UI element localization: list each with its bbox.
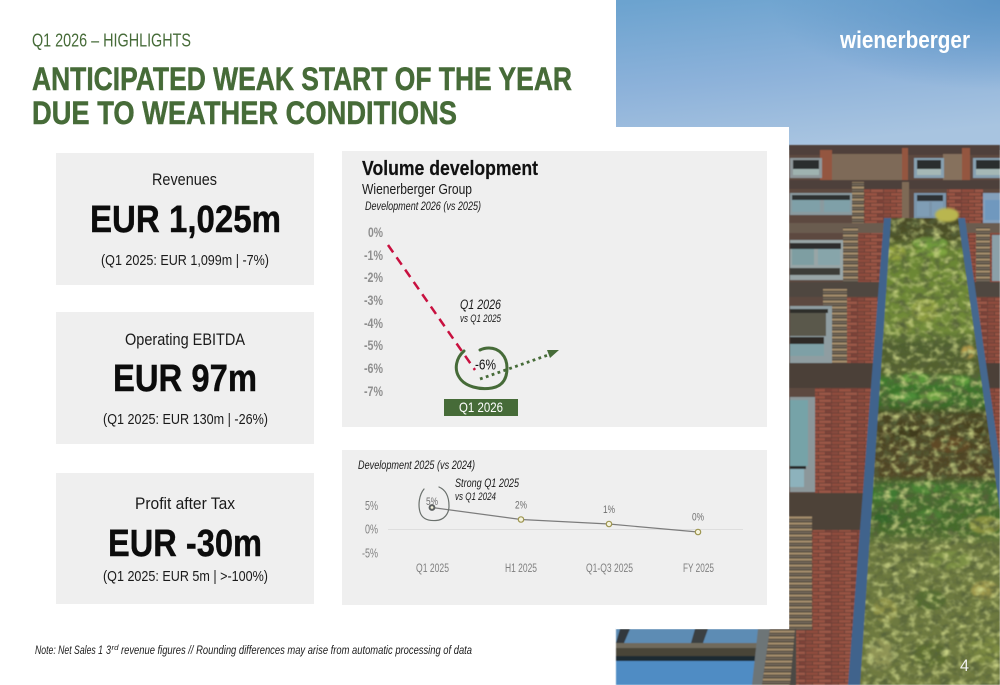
panel: operating EBITDA: EUR 97m [113,358,257,400]
title: DUE TO WEATHER CONDITIONS [32,95,457,131]
foliage light texture [850,205,1000,685]
left blue frame of green wall [848,218,891,685]
value label: -6%: -6% [475,356,496,374]
panel: profit after tax: Profit after Tax [135,495,236,513]
y axis labels [362,499,378,560]
panel: profit after tax [56,473,314,604]
yellow plant at top of wall [935,208,959,222]
x axis labels [416,563,714,575]
data line [432,508,698,532]
hand-drawn highlight circle [456,348,507,389]
red dashed decline line [388,245,475,370]
data labels: 0% [692,512,704,524]
footnote: revenue figures // Rounding differences may arise from automatic processing of data [121,645,472,657]
y axis labels: -5% [362,546,378,560]
y axis labels: 0% [365,522,378,536]
data labels: 1% [603,504,615,516]
y axis labels: -5% [364,337,383,353]
annotation: Q1 2026 vs Q1 2025: Q1 2026 [460,296,501,312]
subheading: wienerberger group: Wienerberger Group [362,181,472,198]
y axis labels [364,224,383,399]
data labels [426,496,704,524]
footnote: rd [112,645,120,652]
category label: Q1 2026 [444,399,518,416]
y axis labels: -7% [364,383,383,399]
panel: revenues [56,153,314,285]
data markers [430,505,701,535]
x axis labels: H1 2025 [505,563,537,575]
hand-drawn highlight circle [419,487,449,521]
annotation: strong Q1 2025: vs Q1 2024 [455,491,496,503]
footnote [35,645,472,657]
facade row 3 [789,223,1000,282]
category label: Q1 2026: Q1 2026 [459,399,503,415]
photo: sky background [616,0,1000,150]
zero gridline [388,528,743,530]
data labels: 5% [426,496,438,508]
foliage dark texture [850,205,1000,685]
annotation: strong Q1 2025: Strong Q1 2025 [455,476,519,490]
footnote: 3 [106,645,111,657]
panel: revenues: EUR 1,025m [90,199,281,241]
x axis labels: Q1 2025 [416,563,449,575]
annotation: Q1 2026 vs Q1 2025: vs Q1 2025 [460,313,502,325]
heading: volume development: Volume development [362,157,538,180]
green wall foliage [850,205,1000,685]
wienerberger logo: wienerberger [839,27,970,54]
photo: lower window strip [616,629,796,685]
panel: operating EBITDA: Operating EBITDA [125,331,245,349]
facade row 4 [789,282,1000,365]
white content panel over photo [616,127,789,629]
panel: revenues: (Q1 2025: EUR 1,099m | -7%) [101,252,269,269]
y axis labels: -4% [364,315,383,331]
y axis labels: 0% [368,224,383,240]
section label: Q1 2026 – HIGHLIGHTS [32,30,191,50]
facade row 2 [789,180,1000,223]
footnote: Note: Net Sales 1 [35,645,103,657]
facade row 5 [789,363,1000,493]
panel: profit after tax: EUR -30m [108,523,262,565]
caption: development 2025: Development 2025 (vs 2024) [358,458,475,472]
data labels: 2% [515,500,527,512]
photo: brick facade with green wall [789,145,1000,685]
title: ANTICIPATED WEAK START OF THE YEAR [32,61,572,97]
caption: development 2026: Development 2026 (vs 2025) [365,199,481,213]
annotation: Q1 2026 vs Q1 2025 [460,296,502,325]
panel: development 2025 line chart [342,450,767,605]
x axis labels: FY 2025 [683,563,714,575]
y axis labels: -6% [364,360,383,376]
panel: profit after tax: (Q1 2025: EUR 5m | >-100%) [103,568,268,585]
annotation: strong Q1 2025 [455,476,519,503]
panel: revenues: Revenues [152,171,217,189]
y axis labels: 5% [365,499,378,513]
panel: operating EBITDA [56,312,314,444]
facade row 1 [789,145,1000,180]
green dotted recovery arrow [480,350,559,379]
y axis labels: -3% [364,292,383,308]
page number: 4 [960,656,969,675]
panel: volume development 2026 [342,151,767,427]
title [32,61,572,131]
panel: operating EBITDA: (Q1 2025: EUR 130m | -26%) [103,411,268,428]
right blue frame of green wall [958,218,1000,510]
x axis labels: Q1-Q3 2025 [586,563,633,575]
y axis labels: -2% [364,269,383,285]
y axis labels: -1% [364,247,383,263]
facade row 6 [789,493,871,685]
